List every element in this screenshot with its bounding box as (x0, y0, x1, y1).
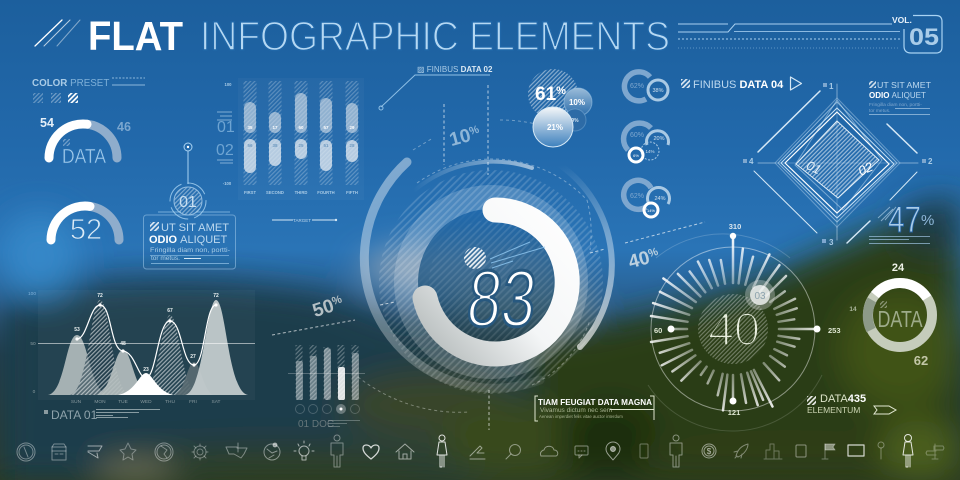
area chart: data 01: 100 (28, 291, 36, 297)
small donut group 3 (624, 180, 670, 217)
bar chart 01/02: TARGET (293, 218, 311, 223)
small donut group 2: 14% (645, 149, 655, 154)
icon: globe with pin (264, 443, 280, 460)
small donut group 3: 24% (654, 196, 666, 202)
title: INFOGRAPHIC ELEMENTS (200, 13, 670, 59)
area chart: data 01: 72 (97, 293, 103, 299)
gauge: data 54/46: 46 (117, 120, 131, 134)
icon: woman figure (903, 434, 913, 467)
small donut group 3: 14% (647, 208, 655, 213)
bubble chart: 10% (569, 98, 585, 107)
tiam feugiat text block: Vivamus dictum nec sem (540, 407, 612, 414)
icon: rocket (734, 444, 748, 458)
label 40% (626, 245, 662, 273)
dashed guide rings (358, 120, 591, 412)
icon: gear (192, 444, 208, 460)
icon: star pin (606, 442, 620, 460)
bar chart 01/02: FIRST (244, 190, 256, 195)
tiam feugiat text block: TIAM FEUGIAT DATA MAGNA (538, 397, 652, 407)
bar chart 01/02 (216, 78, 364, 223)
hatch icon (464, 247, 486, 269)
radial dial 40: 03 (754, 291, 766, 302)
center lines (490, 242, 545, 268)
radar chart: 3 (829, 238, 834, 247)
donut: data 24/62/14: DATA (878, 306, 923, 332)
bar chart 01/02: SECOND (266, 190, 284, 195)
small donut group 1: 38% (652, 88, 664, 94)
small donut group 2: 20% (653, 136, 665, 142)
label 50%: % (331, 293, 344, 308)
header rule lines (678, 24, 900, 48)
volume badge: VOL. (892, 15, 912, 25)
gauge: data 54/46 (40, 116, 131, 168)
icon: woman (437, 435, 447, 467)
radial dial 40: 310 (729, 222, 741, 231)
gauge: 52 (51, 206, 119, 246)
bar chart 01/02: 56 (247, 143, 253, 148)
bar chart 01/02: 29 (349, 125, 355, 130)
bar chart 01/02: 17 (272, 125, 278, 130)
volume badge (892, 15, 942, 53)
area chart: data 01: 48 (120, 341, 126, 347)
icon: shop (52, 444, 66, 460)
outer right arc (560, 165, 612, 347)
area chart: data 01: WED (140, 399, 152, 405)
center value: 83 (463, 253, 541, 343)
bar chart 01/02: 35 (247, 125, 253, 130)
icon: hand pointer (470, 446, 485, 459)
area chart: data 01: TUE (118, 399, 128, 405)
area chart: data 01: 53 (74, 327, 80, 333)
radar chart: 01 (804, 158, 824, 177)
icon: flag (822, 444, 835, 459)
radial dial 40: 121 (728, 408, 740, 417)
label 40%: 40 (626, 247, 652, 273)
icon: location post (878, 442, 884, 459)
gauge: data 54/46: 54 (40, 116, 54, 130)
small donut group 2 (624, 123, 668, 162)
bubble chart (528, 69, 592, 147)
radar note text (869, 81, 931, 114)
radar chart: 4 (749, 157, 754, 166)
dial spokes (651, 235, 816, 410)
radial dial 40: 40 (708, 303, 760, 355)
outer left arc (364, 162, 540, 388)
icon: dollar (702, 444, 716, 458)
47 percent stat: 47 (888, 199, 921, 240)
small donut group 2: 60% (630, 132, 644, 139)
area chart: data 01: SAT (212, 399, 221, 405)
title: FLAT (88, 13, 183, 59)
label 10% (447, 123, 483, 151)
bubble chart: % (556, 85, 566, 97)
bar chart 01/02: 51 (323, 143, 329, 148)
small donut group 1 (624, 72, 668, 101)
small donut group 3: 62% (630, 193, 644, 200)
area chart: data 01: DATA 01 (51, 408, 98, 422)
radial dial 40 (648, 222, 841, 431)
label 10%: % (468, 124, 481, 138)
bar chart 01/02: -100 (223, 181, 232, 186)
icon: chat (575, 446, 588, 458)
icon: laptop (848, 445, 864, 456)
finibus data 04 heading (681, 77, 802, 91)
radar note text: ODIO ALIQUET (869, 91, 926, 100)
bubble chart: 9% (571, 118, 579, 124)
color preset: COLOR PRESET (32, 78, 109, 89)
dashed spoke lines (272, 85, 705, 430)
radial dial 40: 253 (828, 326, 841, 335)
bar chart 01/02: FOURTH (317, 190, 335, 195)
area chart: data 01: SUN (71, 399, 82, 405)
tiam feugiat text block: Aenean imperdiet felis vitae auctor interdum (539, 414, 623, 419)
tiam feugiat text block (535, 396, 654, 421)
donut: data 24/62/14 (849, 262, 932, 368)
small donut group 2: 6% (633, 153, 639, 158)
icon: star (120, 443, 136, 460)
label 50%: 50 (310, 295, 337, 322)
bar chart 01/02: 57 (323, 125, 329, 130)
callout 01: 01 (179, 194, 197, 211)
bar chart 01/02: 28 (349, 143, 355, 148)
label 50% (310, 292, 346, 322)
icon row (17, 434, 944, 467)
icon: house (396, 444, 414, 459)
area chart: data 01: THU (165, 399, 175, 405)
callout 01: Fringilla diam non, portti- (150, 247, 230, 254)
finibus data 02 (379, 65, 493, 110)
icon: cloud (540, 446, 558, 456)
47 percent stat: % (921, 212, 934, 229)
bar chart 01/02: 100 (224, 82, 232, 87)
radar note text: Fringilla diam non, portti- (869, 102, 922, 108)
callout 01: ODIO ALIQUET (149, 234, 228, 246)
data435 elementum: ELEMENTUM (807, 405, 860, 415)
callout 01 (144, 143, 236, 269)
bar chart 01/02: 25 (298, 143, 304, 148)
chart: 01 doc (288, 345, 365, 430)
area chart: data 01: 0 (33, 389, 36, 395)
icon: light bulb (294, 441, 314, 460)
callout 01: UT SIT AMET (161, 222, 229, 234)
bar chart 01/02: 01 (217, 119, 235, 136)
icon: magnifier (506, 444, 520, 459)
area chart: data 01: 27 (190, 354, 196, 360)
icon: man (331, 435, 343, 467)
radar chart (743, 82, 933, 247)
icon: heart (363, 445, 379, 459)
icon: globe (155, 443, 173, 461)
donut: data 24/62/14: 24 (892, 262, 905, 274)
bubble chart: 61 (535, 84, 556, 105)
hatched disc (379, 170, 603, 394)
radar chart: 1 (829, 82, 834, 91)
icon: hand (88, 446, 102, 458)
callout 01: tor metus. (151, 255, 180, 262)
area chart: data 01 (28, 290, 255, 422)
small donut group 1: 62% (630, 83, 644, 90)
icon: city (764, 444, 782, 459)
bar chart 01/02: 60 (298, 125, 304, 130)
finibus data 02: ▨ FINIBUS DATA 02 (417, 65, 493, 74)
area chart: data 01: MON (94, 399, 106, 405)
inner disc (418, 209, 564, 355)
area chart: data 01: FRI (189, 399, 197, 405)
label 40%: % (647, 246, 660, 260)
chart: 01 doc: 01 DOC (298, 419, 334, 430)
radial dial 40: 60 (654, 326, 662, 335)
icon: phone (640, 444, 648, 458)
donut: data 24/62/14: 14 (849, 306, 857, 313)
translucent ring (406, 197, 576, 367)
top arc (415, 162, 532, 190)
radar chart: 2 (928, 157, 933, 166)
area chart: data 01: 67 (167, 308, 173, 314)
bar chart 01/02: 38 (272, 143, 278, 148)
47 percent stat (869, 199, 934, 244)
finibus data 04 heading: FINIBUS DATA 04 (693, 79, 784, 91)
bar chart 01/02: 02 (216, 142, 234, 159)
radar note text: UT SIT AMET (877, 81, 931, 90)
icon: usa map (226, 443, 247, 458)
gauge: data 54/46: DATA (62, 146, 107, 168)
area chart: data 01: 72 (213, 293, 219, 299)
area chart: data 01: 50 (30, 341, 36, 347)
radar note text: tor metus. (869, 108, 890, 114)
icon: tablet (796, 445, 806, 457)
bar chart 01/02: FIFTH (346, 190, 358, 195)
radar chart: 02 (856, 159, 876, 179)
donut: data 24/62/14: 62 (914, 353, 928, 368)
icon: man figure (670, 435, 682, 467)
icon: clock (17, 443, 35, 461)
data435 elementum: DATA435 (820, 393, 866, 405)
area chart: data 01: 23 (143, 367, 149, 373)
bubble chart: 21% (547, 123, 563, 132)
central donut 83 (358, 120, 612, 412)
volume badge: 05 (909, 24, 939, 51)
main white arc (425, 210, 567, 354)
icon: dollar: $ (707, 447, 712, 456)
data435 elementum (807, 393, 896, 415)
gauge: 52: 52 (70, 214, 102, 246)
title stripes icon (35, 20, 80, 46)
area peaks (48, 300, 248, 395)
label 10%: 10 (447, 125, 473, 151)
bar chart 01/02: THIRD (295, 190, 307, 195)
color preset (32, 78, 145, 103)
icon: signpost (926, 444, 944, 459)
